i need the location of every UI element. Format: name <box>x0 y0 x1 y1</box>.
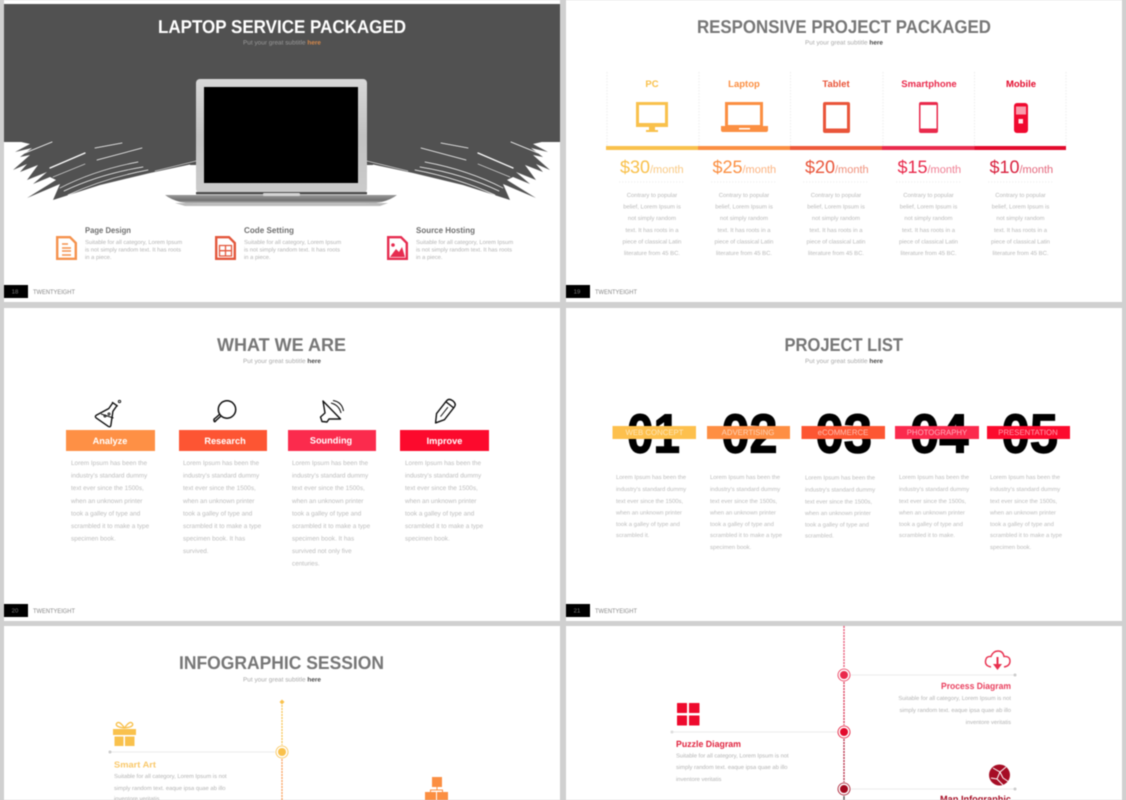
item 01: scrambled it. <box>616 532 650 539</box>
icon: cloud download <box>985 651 1010 670</box>
timeline item: process diagram: simply random text. eaque ipsa quae ab illo <box>900 707 1011 714</box>
card: analyze: took a galley of type and <box>71 510 141 518</box>
item 05: took a galley of type and <box>990 521 1054 528</box>
item 02: Lorem Ipsum has been the <box>710 474 781 481</box>
feature: source hosting: is not simply random text. It has roots <box>416 246 512 254</box>
feature: source hosting <box>388 225 513 261</box>
column: Mobile: text. It has roots in a <box>994 227 1048 234</box>
item 04: Lorem Ipsum has been the <box>899 474 970 481</box>
dark brush header <box>4 4 560 200</box>
card: improve: scrambled it to make a type <box>405 523 484 530</box>
item 01: when an unknown printer <box>615 510 682 516</box>
subtitle: Put your great subtitle here <box>243 358 322 365</box>
footer: 20 <box>12 608 19 614</box>
icon: mobile phone <box>1014 103 1028 133</box>
subtitle: Put your great subtitle here <box>805 358 884 365</box>
card: analyze: text ever since the 1500s, <box>71 485 144 492</box>
card: research: scrambled it to make a type <box>183 523 262 530</box>
column: Tablet: belief, Lorem Ipsum is <box>807 204 865 210</box>
column: Tablet: piece of classical Latin <box>807 238 865 246</box>
footer: TWENTYEIGHT <box>595 608 637 615</box>
item 05: PRESENTATION <box>998 428 1058 437</box>
item 02 <box>707 402 790 551</box>
footer: 18 <box>12 288 19 296</box>
feature: source hosting: Suitable for all category, Lorem Ipsum <box>416 239 513 246</box>
card: sounding: text ever since the 1500s, <box>292 485 365 492</box>
slide 23: timeline diagrams <box>566 626 1122 800</box>
icon: smartphone <box>919 102 938 133</box>
feature: source hosting: in a piece. <box>416 254 443 261</box>
item 01: 01 <box>627 402 680 464</box>
item 04: took a galley of type and <box>899 521 963 528</box>
card: sounding: specimen book. It has <box>292 536 354 542</box>
card: research: Research <box>204 436 246 446</box>
timeline item: puzzle diagram: inventore veritatis <box>676 776 722 783</box>
timeline item: process diagram: inventore veritatis <box>966 719 1011 726</box>
item 03: industry's standard dummy <box>805 486 875 494</box>
card: improve: text ever since the 1500s, <box>405 485 478 492</box>
slide 18: laptop service packaged <box>4 0 560 302</box>
card: sounding: Lorem Ipsum has been the <box>292 460 368 467</box>
item 05: industry's standard dummy <box>990 486 1060 493</box>
item 03: text ever since the 1500s, <box>805 498 872 506</box>
icon: flask <box>95 399 122 427</box>
column: Mobile: /month <box>1020 164 1053 176</box>
column: Tablet: Tablet <box>822 79 850 90</box>
column: PC: belief, Lorem Ipsum is <box>623 204 681 210</box>
timeline item: smart art: Smart Art <box>114 760 156 770</box>
item 03: 03 <box>816 402 872 464</box>
column: Tablet: text. It has roots in a <box>809 227 863 234</box>
icon: table document <box>216 237 235 259</box>
card: research: text ever since the 1500s, <box>183 485 256 492</box>
slide 20: what we are <box>4 308 560 621</box>
icon: document <box>57 237 76 259</box>
item 02: specimen book. <box>710 544 752 551</box>
column: Tablet: Contrary to popular <box>811 192 861 199</box>
timeline item: process diagram: Process Diagram <box>941 681 1011 691</box>
card: analyze: Analyze <box>93 436 127 446</box>
card: research <box>179 401 267 555</box>
card: analyze: specimen book. <box>71 536 116 542</box>
column: Smartphone: text. It has roots in a <box>902 227 956 234</box>
column: Laptop: /month <box>742 164 776 176</box>
item 04: industry's standard dummy <box>899 486 969 493</box>
column: Smartphone: belief, Lorem Ipsum is <box>900 204 957 210</box>
column: Smartphone: piece of classical Latin <box>899 238 958 246</box>
item 04: scrambled it to make. <box>899 532 955 539</box>
footer <box>566 604 637 617</box>
column: Laptop: belief, Lorem Ipsum is <box>715 204 773 210</box>
card: improve <box>400 398 489 542</box>
column: Tablet: literature from 45 BC. <box>808 250 864 257</box>
item 01: Lorem Ipsum has been the <box>616 474 687 481</box>
feature: code setting: in a piece. <box>244 254 271 261</box>
card: improve: took a galley of type and <box>405 510 475 518</box>
column: PC <box>619 79 684 257</box>
column: Tablet: not simply random <box>812 215 860 222</box>
column: Laptop: not simply random <box>720 215 768 222</box>
item 02: when an unknown printer <box>709 510 776 516</box>
column: PC: $30 <box>620 157 650 177</box>
column: Smartphone: /month <box>928 164 961 176</box>
column: Laptop: literature from 45 BC. <box>716 250 772 257</box>
icon: monitor <box>636 102 668 132</box>
card: sounding: centuries. <box>292 560 320 568</box>
item 04 <box>895 402 979 539</box>
feature: page design: Page Design <box>85 225 131 235</box>
item 01: WEB CONCEPT <box>625 428 684 437</box>
card: research: industry's standard dummy <box>183 472 260 480</box>
column: PC: /month <box>650 164 684 176</box>
timeline spine <box>280 700 284 800</box>
footer <box>566 285 637 298</box>
column: Mobile: belief, Lorem Ipsum is <box>992 204 1049 210</box>
item 02: scrambled it to make a type <box>710 532 783 539</box>
title: LAPTOP SERVICE PACKAGED <box>158 16 406 37</box>
column: Laptop: $25 <box>712 157 743 177</box>
card: analyze: when an unknown printer <box>70 498 143 505</box>
item 03: when an unknown printer <box>804 510 871 517</box>
title: INFOGRAPHIC SESSION <box>179 652 384 673</box>
feature: code setting <box>216 225 341 261</box>
column: PC: piece of classical Latin <box>623 238 681 246</box>
column: PC: not simply random <box>628 215 676 222</box>
column: Smartphone: literature from 45 BC. <box>901 250 957 257</box>
column: Laptop: Laptop <box>728 79 760 90</box>
feature: page design <box>57 225 182 261</box>
feature: page design: is not simply random text. It has roots <box>85 246 181 254</box>
card: sounding: industry's standard dummy <box>292 472 369 480</box>
subtitle: Put your great subtitle here <box>243 676 322 684</box>
timeline item: smart art: simply random text. eaque ipsa quae ab illo <box>114 785 226 792</box>
card: sounding: took a galley of type and <box>292 510 362 518</box>
title: WHAT WE ARE <box>217 334 346 355</box>
card: research: took a galley of type and <box>183 510 253 518</box>
card: improve: Lorem Ipsum has been the <box>405 460 481 467</box>
card: analyze: industry's standard dummy <box>71 472 148 480</box>
timeline item: puzzle diagram: simply random text. eaque ipsa quae ab illo <box>676 764 788 771</box>
column: Mobile <box>988 79 1053 257</box>
icon: four squares <box>677 703 700 726</box>
column: Smartphone <box>896 79 961 257</box>
item 05: specimen book. <box>990 544 1032 551</box>
item 01: text ever since the 1500s, <box>616 498 683 505</box>
column: Mobile: literature from 45 BC. <box>993 250 1049 257</box>
timeline spine <box>843 626 845 800</box>
column: PC: PC <box>645 79 659 90</box>
feature: page design: in a piece. <box>85 254 112 261</box>
card: improve: Improve <box>427 436 462 446</box>
card: improve: specimen book. <box>405 536 450 542</box>
footer: TWENTYEIGHT <box>595 289 637 296</box>
item 05: when an unknown printer <box>989 510 1056 516</box>
slide 19: responsive project packaged <box>566 0 1122 302</box>
timeline item: smart art: Suitable for all category, Lorem Ipsum is not <box>114 773 227 780</box>
card: research: specimen book. It has <box>183 536 245 542</box>
item 01: industry's standard dummy <box>616 486 686 493</box>
column: Mobile: Mobile <box>1006 79 1036 90</box>
item 03: Lorem Ipsum has been the <box>805 474 876 482</box>
feature: code setting: Code Setting <box>244 225 294 235</box>
card: improve: industry's standard dummy <box>405 472 482 480</box>
card: sounding: when an unknown printer <box>291 498 364 505</box>
column: Tablet <box>803 79 869 257</box>
item 02: ADVERTISING <box>722 428 774 437</box>
column: Mobile: piece of classical Latin <box>991 238 1050 246</box>
column: Smartphone: Contrary to popular <box>903 192 954 199</box>
icon: magnifier <box>214 401 236 422</box>
icon: speaker <box>320 400 344 422</box>
column: Mobile: $10 <box>990 157 1020 177</box>
footer: 21 <box>574 608 581 614</box>
item 04: when an unknown printer <box>898 510 965 516</box>
card: sounding: survived not only five <box>292 548 352 555</box>
column: Tablet: $20 <box>805 157 835 177</box>
item 05: Lorem Ipsum has been the <box>990 474 1061 481</box>
icon: gift <box>113 722 136 746</box>
title: RESPONSIVE PROJECT PACKAGED <box>697 16 991 37</box>
item 03: eCOMMERCE <box>818 428 868 437</box>
feature: code setting: is not simply random text. It has roots <box>244 246 340 254</box>
icon: pencil <box>432 398 457 426</box>
column: Mobile: not simply random <box>996 215 1045 222</box>
column: PC: text. It has roots in a <box>625 227 679 234</box>
item 05: scrambled it to make a type <box>990 532 1063 539</box>
item 05 <box>987 402 1070 551</box>
column: PC: literature from 45 BC. <box>624 250 680 257</box>
column: Laptop: piece of classical Latin <box>715 238 773 246</box>
item 02: text ever since the 1500s, <box>710 498 777 505</box>
item 02: industry's standard dummy <box>710 486 780 493</box>
slide 21: project list <box>566 308 1122 621</box>
footer <box>4 604 75 617</box>
column: Smartphone: Smartphone <box>901 79 957 90</box>
card: sounding: Sounding <box>310 436 352 446</box>
laptop illustration <box>165 79 397 206</box>
card: improve: when an unknown printer <box>404 498 477 505</box>
column: Mobile: Contrary to popular <box>995 192 1046 199</box>
card: analyze: scrambled it to make a type <box>71 523 150 530</box>
item 03: scrambled. <box>805 532 834 540</box>
column: Laptop <box>711 79 776 257</box>
footer <box>4 285 75 298</box>
column: Laptop: Contrary to popular <box>719 192 769 199</box>
item 05: 05 <box>1002 402 1058 464</box>
timeline item: smart art <box>108 722 288 800</box>
item 03: took a galley of type and <box>805 522 869 528</box>
subtitle: Put your great subtitle here <box>243 40 322 46</box>
card: research: Lorem Ipsum has been the <box>183 460 259 467</box>
subtitle: Put your great subtitle here <box>805 40 884 46</box>
item 03 <box>802 402 885 540</box>
title: PROJECT LIST <box>784 334 904 355</box>
item 04: text ever since the 1500s, <box>899 498 966 505</box>
item 05: text ever since the 1500s, <box>990 498 1057 505</box>
timeline item: puzzle diagram: Puzzle Diagram <box>676 739 741 749</box>
column: PC: Contrary to popular <box>627 192 677 199</box>
column: Smartphone: $15 <box>898 157 928 177</box>
icon: org chart <box>425 777 448 800</box>
footer: 19 <box>574 288 581 296</box>
item 04: PHOTOGRAPHY <box>907 428 968 437</box>
footer: TWENTYEIGHT <box>33 289 75 296</box>
card: sounding <box>288 400 376 568</box>
item 01 <box>612 402 696 539</box>
timeline item: process diagram: Suitable for all category, Lorem Ipsum is not <box>898 695 1011 702</box>
timeline item: puzzle diagram: Suitable for all category, Lorem Ipsum is not <box>676 752 789 760</box>
feature: page design: Suitable for all category, Lorem Ipsum <box>85 239 182 246</box>
timeline item: puzzle diagram <box>670 703 850 783</box>
item 01: took a galley of type and <box>616 521 680 528</box>
pricing table grid <box>606 72 1066 150</box>
feature: code setting: Suitable for all category, Lorem Ipsum <box>244 239 341 246</box>
item 04: 04 <box>910 402 969 464</box>
item 02: took a galley of type and <box>710 521 774 528</box>
card: analyze: Lorem Ipsum has been the <box>71 460 147 467</box>
icon: globe <box>989 764 1010 786</box>
card: analyze <box>66 399 155 542</box>
footer: TWENTYEIGHT <box>33 608 75 615</box>
column: Laptop: text. It has roots in a <box>717 227 771 234</box>
icon: tablet <box>823 102 850 133</box>
item 02: 02 <box>722 402 778 464</box>
slide 22: infographic session <box>4 626 560 800</box>
column: Tablet: /month <box>835 164 869 176</box>
timeline item: map infographic <box>838 764 1016 800</box>
column: Smartphone: not simply random <box>904 215 953 222</box>
timeline item: process diagram <box>838 651 1016 726</box>
card: research: when an unknown printer <box>182 498 255 505</box>
card: research: survived. <box>183 548 209 555</box>
card: sounding: scrambled it to make a type <box>292 523 371 530</box>
icon: laptop <box>721 102 768 132</box>
feature: source hosting: Source Hosting <box>416 225 475 235</box>
icon: picture document <box>388 237 407 259</box>
